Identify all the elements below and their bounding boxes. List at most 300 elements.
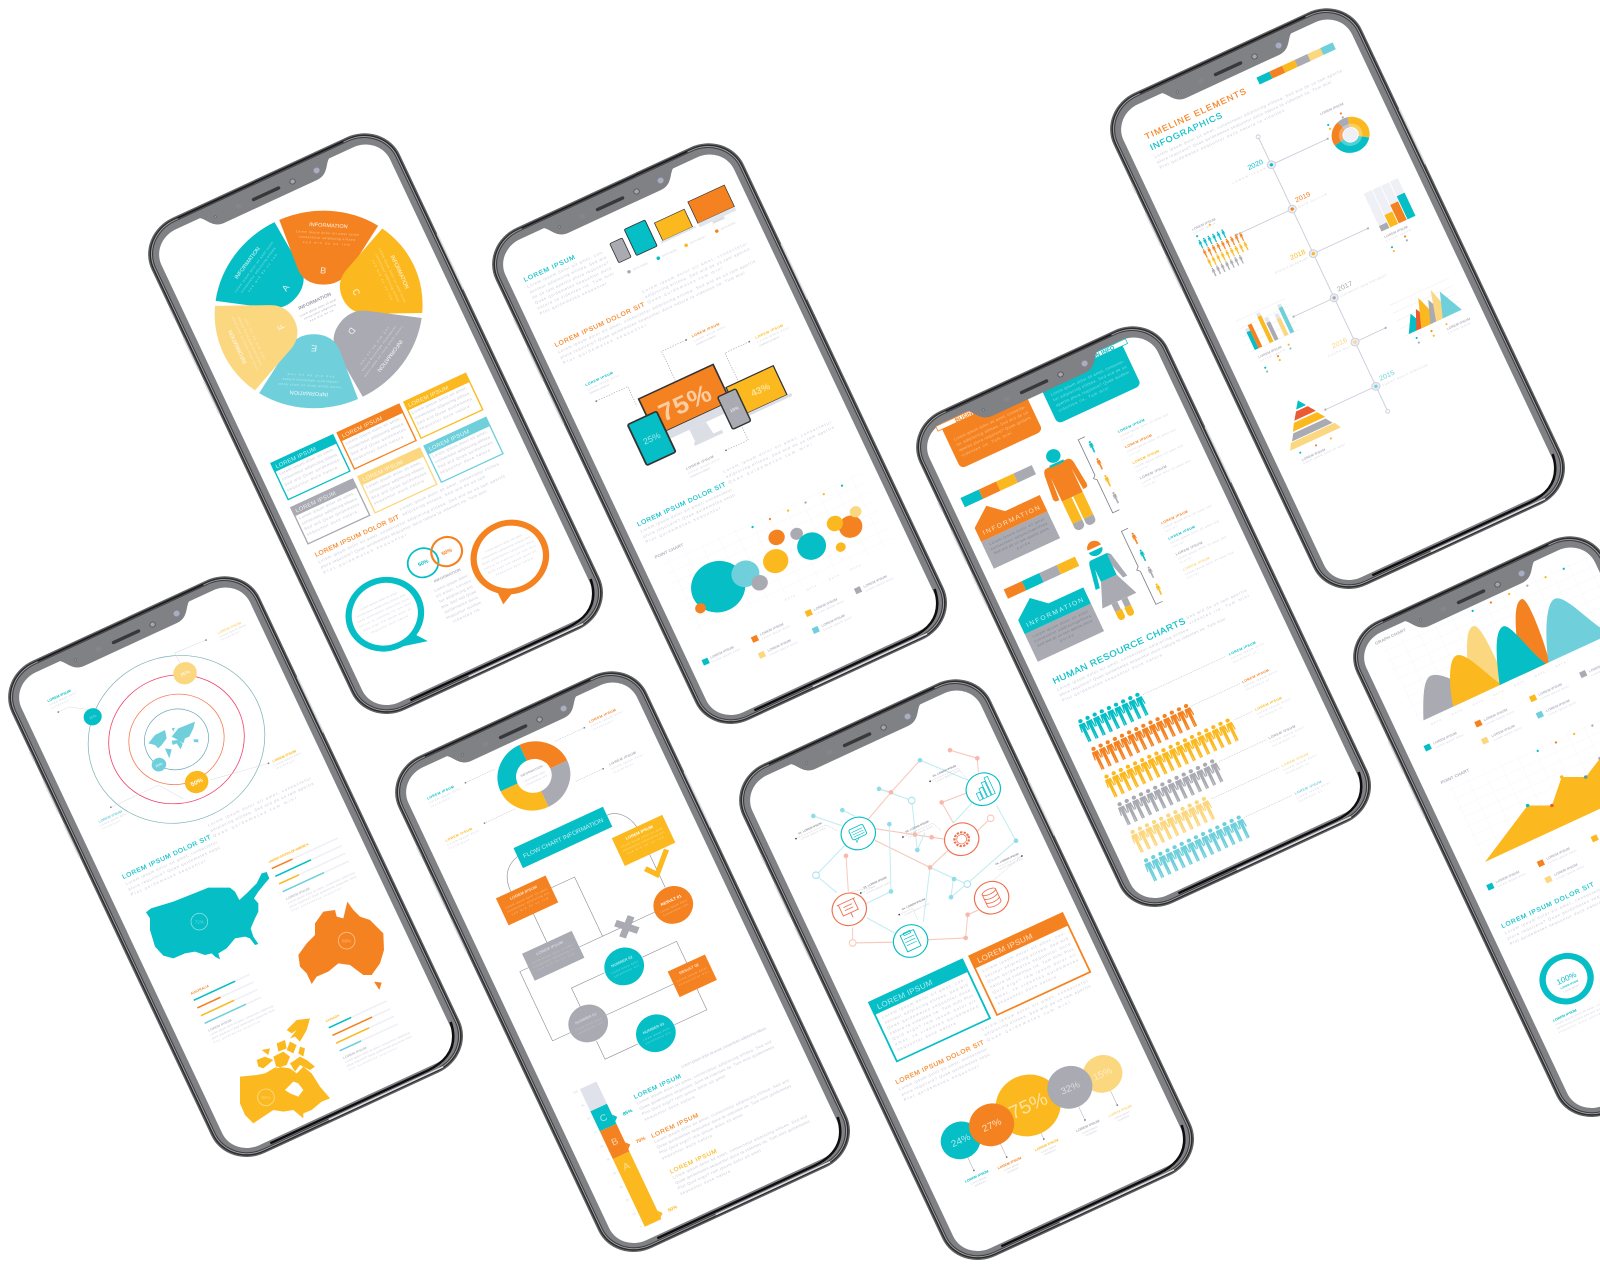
- grouped bars chart: LOREM IPSUM: [1258, 345, 1283, 359]
- teal panel: videntes iie. Tum mini: [1057, 386, 1109, 413]
- device labels: incididunt ut labore: [695, 334, 717, 346]
- teal panel: [1037, 338, 1146, 424]
- body text: plura requirere? Quae quidemetes sequuntur duce natura ta videntes iie. Tum mini: [1156, 80, 1332, 164]
- text block yellow: Plot Quid ergo? rem ipsum dolor sit amet: [677, 1148, 762, 1191]
- wheel chart: consectetur adipiscing elitsea: [361, 326, 397, 372]
- body text: Lorem ipsum dolor sit amet, consectetur: [981, 978, 1089, 1032]
- flow result 01: Lorem ipsum dolor: [660, 898, 688, 914]
- wheel chart: INFORMATION: [289, 389, 329, 397]
- stacked bars chart: [1364, 178, 1426, 253]
- device labels: Lorem ipsum dolor: [687, 457, 721, 475]
- orbit markers: 50%: [190, 777, 205, 788]
- timeline: OFFICIA DESERUNT: [1274, 256, 1309, 275]
- map percentage rings: 94%: [261, 1095, 271, 1100]
- mountain chart: [1389, 277, 1473, 352]
- device labels: LOREM IPSUM: [685, 455, 714, 471]
- percent circles: 50%: [441, 547, 454, 557]
- info boxes: consectetur adipiscing elitsea: [301, 496, 358, 526]
- information box: consectetur adipiscingelitsea: [1034, 614, 1092, 643]
- graph chart: DATA: [1513, 679, 1525, 688]
- orbit chart: [55, 627, 293, 854]
- wheel chart: consectetur adipiscing elitsea: [282, 377, 338, 384]
- people chart: Lorem ipsum: [1193, 221, 1217, 235]
- info boxes: Sed wid Quae quidemetes: [350, 427, 406, 456]
- network labels: 05. LOREM IPSUM: [932, 764, 957, 778]
- bubble labels: Lorem ipsum: [1040, 1143, 1058, 1154]
- graph legend: Lorem ipsum dolor: [1485, 709, 1515, 726]
- info box teal: [868, 958, 990, 1062]
- text block teal: sequuntur duce natura: [644, 1094, 696, 1122]
- phone: graph chart: [1340, 523, 1600, 1130]
- information text: sequuntur quidem: [445, 599, 483, 620]
- bubble labels: LOREM IPSUM: [997, 1156, 1022, 1170]
- timeline: FUGIAT NULLA PARIATUR: [1382, 363, 1428, 387]
- flow yellow box: LOREM IPSUM: [625, 824, 654, 841]
- text block orange: Plot Quid ergo? rem ipsum dolor sit amet: [658, 1112, 744, 1155]
- device labels: LOREM IPSUM: [691, 322, 720, 338]
- phone frame: [726, 666, 1207, 1273]
- body text: plura requirere? Quae quidemetes sequuntur duce natura ta videntes iie. Tum mini: [1059, 616, 1226, 697]
- pyramid chart: Lorem ipsum dolor sit amet: [1302, 442, 1346, 465]
- bubble labels: incididunt: [1006, 1166, 1019, 1174]
- point legend: Lorem ipsum dolor: [1547, 848, 1577, 865]
- orbit labels: LOREM IPSUM: [272, 749, 297, 763]
- body text: plura requirere? Quae quidemetes sequuntur duce natura ta videntes iie. Tum mini: [560, 270, 746, 360]
- text block teal: Lorem ipsum dolor sit amet, consectetur adipiscing elitsea: [680, 1025, 767, 1069]
- orbit labels: incididunt: [220, 630, 240, 642]
- graph chart: DATA: [1555, 660, 1566, 668]
- bubble labels: incididunt: [1044, 1148, 1057, 1156]
- body text: Lorem ipsum dolor sit amet, consectetur adipiscing elitsea.: [1056, 626, 1191, 692]
- body text: [526, 249, 618, 316]
- body text: Quae quidemetes sequuntur duce: [534, 265, 613, 305]
- row labels: LOREM IPSUM: [1294, 780, 1322, 796]
- point legend: LOREM IPSUM: [1546, 847, 1571, 861]
- labels: LOREM IPSUM: [1132, 449, 1160, 465]
- icon: chart: [961, 767, 1006, 811]
- row labels: incididunt ut: [1298, 789, 1323, 803]
- point legend: Lorem ipsum dolor: [1497, 872, 1527, 888]
- mountain chart: Lorem ipsum: [1448, 321, 1472, 335]
- percentage bubbles: 27%: [981, 1117, 1004, 1135]
- bubble labels: incididunt: [1117, 1114, 1130, 1122]
- information box: quide: [1059, 633, 1074, 643]
- body text: adipiscing elitsea. Sed wid de us tam: [401, 474, 487, 517]
- flow banner: [513, 807, 612, 868]
- information box: Lorem ipsum dolor sit amet: [989, 517, 1045, 546]
- bars: USA: Lorem ipsum dolor sit amet, consectetur adipiscing: [287, 871, 356, 905]
- chart legend: LOREM IPSUM: [821, 614, 846, 628]
- timeline: 2018: [1289, 249, 1307, 262]
- progress ring: LOREM IPSUM: [1552, 1008, 1577, 1023]
- info boxes: sequuntur duce natura: [352, 434, 405, 462]
- colour bar: [960, 465, 1036, 507]
- percent circles: 50%: [417, 558, 430, 568]
- labels: [1160, 499, 1236, 580]
- info box orange: sequuntur duce natura: [997, 974, 1057, 1006]
- text block teal: LOREM IPSUM: [633, 1073, 682, 1101]
- graph legend: Lorem ipsum dolor: [1540, 684, 1569, 701]
- wheel chart: INFORMATION: [388, 254, 410, 290]
- progress ring: Lorem ipsum: [1563, 983, 1580, 994]
- info box orange: amet, ta videntes quidemetes: [994, 957, 1079, 1000]
- info boxes: sequuntur duce natura: [418, 403, 471, 431]
- notch: [787, 701, 930, 779]
- information box: [968, 484, 1060, 569]
- bubble labels: Lorem ipsum: [1113, 1109, 1131, 1120]
- bubble chart: DATA: [806, 584, 817, 592]
- device labels: LOREM IPSUM: [755, 324, 784, 340]
- heading: LOREM IPSUM DOLOR SIT: [636, 482, 727, 528]
- multi-device illustration: 15%: [729, 405, 740, 413]
- orange panel: tur adipiscing elitsea. Sed wid de us: [956, 410, 1029, 447]
- graph legend: Lorem ipsum dolor: [1547, 700, 1577, 717]
- wheel chart: sed wid de us tam: [247, 253, 278, 293]
- map: USA: [146, 872, 269, 959]
- network labels: Lorem ipsum dolor: [997, 856, 1024, 871]
- notch: [196, 155, 339, 233]
- donut labels: LOREM IPSUM: [588, 708, 617, 724]
- information text: tur adipiscing elit: [438, 584, 474, 604]
- phone frame: [479, 130, 960, 737]
- info box orange: secteur adipiscing elitsea. Sed wid: [984, 936, 1069, 979]
- multi-device illustration: 75%: [655, 380, 716, 427]
- body text: Lorem ipsum dolor sit amet, consectetur: [207, 775, 312, 828]
- row labels: incididunt ut: [1245, 678, 1270, 692]
- wheel chart: B: [320, 265, 327, 276]
- flow number 02: [598, 941, 650, 992]
- graph legend: [1423, 656, 1600, 770]
- labels: Lorem ipsum dolor sit amet sed: [1141, 459, 1191, 485]
- orbit labels: Lorem ipsum dolor: [48, 691, 77, 707]
- body text: Quae quidemetes tum mini: [212, 796, 297, 838]
- flow yellow box: Lorem ipsum dolor sit amet: [620, 826, 663, 849]
- labels: incidi: [1171, 540, 1185, 549]
- body text: secteur adipiscing elitsea. Sed wid: [529, 255, 607, 294]
- graph legend: Lorem ipsum dolor: [1434, 733, 1464, 749]
- text block orange: Quae quidemetes sequuntur duce ta videntes iie. Tum mini quidemetes: [656, 1083, 792, 1150]
- pyramid chart: [1272, 389, 1349, 468]
- chart legend: LOREM IPSUM: [767, 639, 792, 653]
- flow gray box: sed wid de us tam: [537, 951, 576, 972]
- wheel chart: consectetur adipiscing elitsea: [240, 246, 277, 293]
- stacked vertical bar: [572, 1072, 680, 1230]
- speech bubble orange: consectetur adipiscing elitsea sed: [481, 535, 531, 561]
- device labels: [585, 296, 830, 502]
- labels: Lorem ipsum dolor sit amet sed: [1184, 550, 1234, 576]
- network labels: 06. LOREM IPSUM: [995, 852, 1020, 866]
- info boxes: Lorem ipsum dolor sit amet,: [278, 447, 335, 476]
- wheel chart: Lorem ipsum dolor sit amet lorem: [233, 241, 274, 293]
- wheel chart: Lorem ipsum dolor sit amet lorem: [363, 326, 404, 378]
- graph chart: DATA: [1451, 708, 1463, 716]
- bracket with figures: [1076, 435, 1123, 514]
- timeline: [1201, 109, 1446, 439]
- body text: Lorem ipsum dolor sit amet, consectetur adipiscing elitsea. Sed wid de us tam apertis: [317, 474, 506, 564]
- info boxes: Sed wid Quae quidemetes: [437, 440, 493, 470]
- row labels: Lorem ipsum dolor: [1296, 781, 1331, 799]
- orbit labels: LOREM IPSUM: [98, 809, 123, 824]
- network labels: Lorem ipsum dolor: [904, 902, 930, 917]
- graph chart: DATA: [1534, 670, 1546, 678]
- point legend: [1486, 833, 1600, 908]
- text block teal: Plot Quid ergo? rem ipsum dolor sit amet: [641, 1073, 727, 1116]
- bars: Canada: [325, 990, 414, 1072]
- icon: database: [969, 876, 1014, 920]
- body text: videntes iie. Tum mini: [1188, 593, 1250, 625]
- speech bubble teal: sequuntur duce natura: [370, 614, 409, 634]
- body text: Plot quidemetes sequuntur: [903, 1063, 980, 1102]
- stacked vertical bar: 20: [625, 1197, 630, 1202]
- labels: Lorem ipsum dolor sit amet sed: [1134, 443, 1184, 469]
- timeline: 2017: [1336, 281, 1354, 293]
- info boxes: Lorem ipsum dolor sit amet,: [431, 429, 488, 459]
- info boxes: sequuntur duce natura: [286, 465, 338, 492]
- heading: LOREM IPSUM DOLOR SIT: [1500, 881, 1595, 930]
- text block orange: LOREM IPSUM: [650, 1112, 700, 1140]
- info boxes: Sed wid Quae quidemetes: [416, 396, 473, 426]
- chart legend: Lorem ipsum dolor: [823, 615, 852, 632]
- text block orange: Lorem ipsum dolor sit amet, consectetur adipiscing elitsea. Sed wid: [653, 1078, 789, 1144]
- wheel chart: sed wid de us: [309, 308, 334, 323]
- title: TIMELINE ELEMENTS: [1143, 86, 1248, 141]
- bars: USA: UNITED STATES OF AMERICA: [268, 842, 310, 864]
- body text: adipiscing elitsea. Sed wid de us tam apertis: [725, 425, 835, 479]
- bars: Australia: [190, 963, 278, 1044]
- orbit labels: incididunt: [50, 698, 70, 710]
- device labels: Lorem ipsum dolor: [693, 325, 726, 343]
- orbit labels: Lorem ipsum dolor: [274, 751, 302, 767]
- orange panel: Lorem ipsum dolor sit amet, consecte-: [953, 404, 1027, 442]
- speech bubble teal: Quae quidemetes sequuntur duce: [356, 596, 410, 624]
- notch: [964, 348, 1107, 426]
- info boxes: LOREM IPSUM: [407, 385, 450, 409]
- country maps: [146, 872, 384, 1123]
- bars: Australia: Lorem ipsum dolor sit amet, consectetur adipiscing: [209, 1004, 274, 1037]
- labels: incidi: [1179, 556, 1192, 565]
- wheel chart: consectetur adipiscing elitsea: [374, 253, 401, 303]
- speech bubble orange: Lorem ipsum dolor sit amet: [484, 533, 523, 553]
- text block yellow: [669, 1107, 815, 1196]
- flow result 01: RESULT 01: [660, 893, 683, 907]
- heading: LOREM IPSUM DOLOR SIT: [554, 302, 646, 349]
- labels: Lorem ipsum dolor sit amet sed: [1126, 428, 1176, 453]
- info boxes: consectetur adipiscing elitsea: [434, 434, 491, 464]
- stacked vertical bar: 50%: [667, 1204, 679, 1214]
- info boxes: Lorem ipsum dolor sit amet,: [365, 460, 422, 489]
- text block yellow: Quae quidemetes sequuntur duce ta videntes iie. Tum mini quidemetes: [674, 1119, 810, 1185]
- device labels: Lorem ipsum dolor: [587, 373, 620, 391]
- body text: Plot quidemetes sequuntur: [539, 281, 608, 316]
- map percentage rings: 89%: [342, 938, 351, 943]
- body text: Lorem ipsum dolor sit amet, consectetur adipiscing elitsea. Sed wid de us tam apertis: [557, 259, 756, 354]
- information text: [429, 565, 485, 626]
- speech bubble orange: Quae quidemetes sequuntur duce: [481, 539, 535, 566]
- stacked vertical bar: 10: [632, 1211, 637, 1216]
- donut labels: incididunt: [430, 796, 452, 808]
- speech bubble orange: Quid ergo rem ipsum dolor sit: [487, 549, 537, 575]
- row labels: incididunt ut: [1285, 761, 1310, 776]
- donut chart: LOREM IPSUM: [1319, 102, 1344, 116]
- text block teal: Lorem ipsum dolor sit amet, consectetur adipiscing elitsea. Sed wid: [636, 1039, 772, 1105]
- wheel chart: consectetur adipiscing: [303, 302, 337, 321]
- information box: Lorem ipsum dolor sit amet: [1032, 610, 1088, 638]
- graph chart: GRAPH CHART: [1374, 627, 1407, 646]
- donut labels: incididunt: [592, 719, 614, 732]
- text block teal: Quae quidemetes sequuntur duce ta videntes iie. Tum mini quidemetes: [638, 1044, 775, 1111]
- graph chart: [1374, 544, 1600, 733]
- device labels: incididunt ut labore: [589, 382, 610, 395]
- info boxes: consectetur adipiscing elitsea: [368, 465, 425, 495]
- body text: Plot quidemetes sequuntur duce natura ta videntes: [1159, 108, 1285, 170]
- info boxes: Lorem ipsum dolor sit amet,: [298, 491, 355, 520]
- body text: Sed wid de us tam apertis: [1185, 588, 1247, 620]
- chart legend: [701, 572, 902, 683]
- info box teal: sequuntur duce natura: [896, 1020, 957, 1052]
- orange panel: [936, 386, 1043, 471]
- flow result 02: [668, 954, 717, 997]
- map percentage rings: 72%: [195, 919, 204, 924]
- body text: Lorem ipsum dolor sit amet, consectetur adipiscing elitsea. Sed wid de us tam apertis: [1154, 68, 1343, 159]
- bubble labels: [956, 1085, 1136, 1192]
- people chart: [1191, 210, 1254, 277]
- leader lines: [1143, 656, 1292, 834]
- body text: Lorem ipsum dolor sit amet, con-: [526, 249, 605, 289]
- device labels: incididunt ut labore: [758, 335, 780, 348]
- flow number 03: NUMBER 03: [642, 1021, 666, 1035]
- flow orange box: Lorem ipsum dolor sit amet: [505, 887, 548, 910]
- body text: adipiscing elitsea. Sed wid de us tam apertis: [210, 781, 314, 833]
- donut labels: LOREM IPSUM: [609, 751, 637, 767]
- chart legend: LOREM IPSUM: [863, 575, 888, 589]
- icon: check mark: [642, 850, 674, 878]
- bars: Canada: CANADA: [325, 1013, 341, 1023]
- orbit markers: [79, 658, 245, 824]
- grouped bars chart: Lorem ipsum: [1259, 348, 1286, 363]
- timeline: CULPA QUI: [1328, 344, 1351, 358]
- bars: USA: LOREM IPSUM: [285, 887, 310, 901]
- phone: devices and point chart: [479, 130, 960, 737]
- stacked vertical bar: 85%: [622, 1108, 634, 1117]
- notch: [540, 165, 683, 243]
- stacked bars chart: Lorem ipsum: [1385, 227, 1412, 243]
- graph legend: LOREM IPSUM: [1433, 731, 1458, 745]
- info box orange: Quae quidemetes sequuntur duce: [986, 941, 1072, 984]
- chart legend: LOREM IPSUM: [813, 597, 838, 612]
- info boxes: LOREM IPSUM: [428, 429, 471, 453]
- device labels: incididunt ut labore: [689, 466, 711, 479]
- donut chart: Lorem ipsum dolor: [523, 770, 546, 783]
- chart legend: LOREM IPSUM: [759, 622, 784, 637]
- body text: plura requirere? Quae quidemetes sequ: [900, 1052, 990, 1097]
- bubble chart: DATA: [828, 573, 840, 581]
- flow result 02: consectetur elit: [678, 970, 709, 987]
- map: world: [148, 722, 198, 758]
- stacked vertical bar: B: [610, 1136, 620, 1149]
- info box orange: natura ta videntes iie. Tum mihi Plot: [989, 946, 1075, 989]
- flow number 03: [630, 1008, 682, 1059]
- network labels: 01. LOREM IPSUM: [798, 821, 823, 835]
- row labels: LOREM IPSUM: [1241, 668, 1270, 684]
- percent circles: [403, 532, 467, 582]
- donut chart: [1319, 99, 1369, 154]
- network labels: 02. LOREM IPSUM: [905, 819, 930, 834]
- bars: Canada: LOREM IPSUM: [342, 1046, 367, 1060]
- text block teal: [630, 1025, 781, 1122]
- network labels: Lorem ipsum dolor: [800, 826, 827, 841]
- info boxes: LOREM IPSUM: [295, 491, 337, 514]
- bubble labels: incididunt: [1085, 1129, 1098, 1137]
- flow yellow box: consectetur adipiscing elit: [622, 830, 665, 853]
- bars: Australia: Plot quidemetes sequuntur: [213, 1019, 261, 1044]
- flow number 01: Lorem ipsum dolor: [574, 1016, 603, 1032]
- notch: [56, 598, 199, 676]
- wheel chart: INFORMATION: [234, 246, 262, 280]
- wheel chart: F: [275, 322, 287, 331]
- flow orange box: LOREM IPSUM: [509, 884, 538, 901]
- information box: consectetur adipiscingelitsea: [990, 521, 1049, 551]
- text block yellow: Lorem ipsum dolor sit amet, consectetur adipiscing elitsea. Sed wid: [672, 1113, 808, 1180]
- info boxes: Sed wid Quae quidemetes: [283, 457, 340, 487]
- map: Canada: [240, 1018, 330, 1123]
- stacked vertical bar: 60: [600, 1144, 605, 1149]
- flow gray box: consectetur adipiscing elit: [533, 946, 576, 969]
- phone: wheel diagram: [135, 120, 616, 727]
- labels: LOREM IPSUM: [1117, 418, 1145, 434]
- wheel chart: C: [350, 287, 362, 298]
- device labels: LOREM IPSUM: [585, 371, 614, 387]
- notch: [1401, 558, 1544, 636]
- flow result 02: RESULT 02: [678, 962, 700, 975]
- stacked vertical bar: 40: [612, 1171, 617, 1176]
- stacked vertical bar: 70: [593, 1130, 598, 1135]
- body text: adipiscing elitsea. Sed wid de us tam apertis: [983, 984, 1091, 1037]
- point legend: LOREM IPSUM: [1495, 870, 1520, 884]
- body text: adipiscing elitsea. Sed wid de us tam apertis: [644, 247, 750, 299]
- body text: plura requirere? Quae quidemetes sequ: [642, 492, 735, 539]
- speech bubble teal: consectetur adipiscing elitsea sed: [356, 593, 406, 619]
- progress ring: [1530, 944, 1600, 1034]
- phone frame: [1097, 0, 1578, 602]
- wheel chart: sed wid de us tam: [243, 318, 266, 360]
- donut labels: Lorem ipsum dolor: [428, 786, 461, 804]
- flow orange box: sed wid de us tam: [511, 896, 550, 916]
- pyramid chart: LOREM IPSUM: [1301, 448, 1326, 462]
- wheel chart: sed wid de us tam: [287, 372, 335, 379]
- information box: [1012, 576, 1104, 662]
- chart legend: Lorem ipsum dolor: [761, 624, 791, 641]
- text block orange: [650, 1072, 797, 1160]
- phone: maps: [0, 563, 476, 1170]
- row labels: Lorem ipsum dolor: [1256, 697, 1291, 716]
- icon: presentation: [827, 887, 872, 931]
- wheel chart: [177, 168, 460, 451]
- wheel chart: INFORMATION: [298, 291, 333, 312]
- body text: plura requirere? Quae quidemetes sequuntur duce natura ta videntes iie. Tum mini: [320, 488, 488, 569]
- graph chart: DATA: [1430, 718, 1442, 726]
- body text: Lorem ipsum dolor sit amet, consectetur: [641, 241, 748, 294]
- percentage bubbles: 75%: [1006, 1088, 1051, 1124]
- information text: sea. Sed wid Quae: [440, 589, 478, 609]
- graph legend: LOREM IPSUM: [1538, 683, 1563, 697]
- info boxes: Sed wid Quae quidemetes: [303, 502, 360, 531]
- map: Australia: [298, 902, 384, 990]
- donut labels: LOREM IPSUM: [426, 785, 455, 801]
- percentage bubbles: 15%: [1091, 1065, 1115, 1083]
- labels: incidi: [1136, 464, 1149, 473]
- row labels: Lorem ipsum dolor: [1230, 641, 1265, 660]
- flow gray box: [522, 931, 584, 981]
